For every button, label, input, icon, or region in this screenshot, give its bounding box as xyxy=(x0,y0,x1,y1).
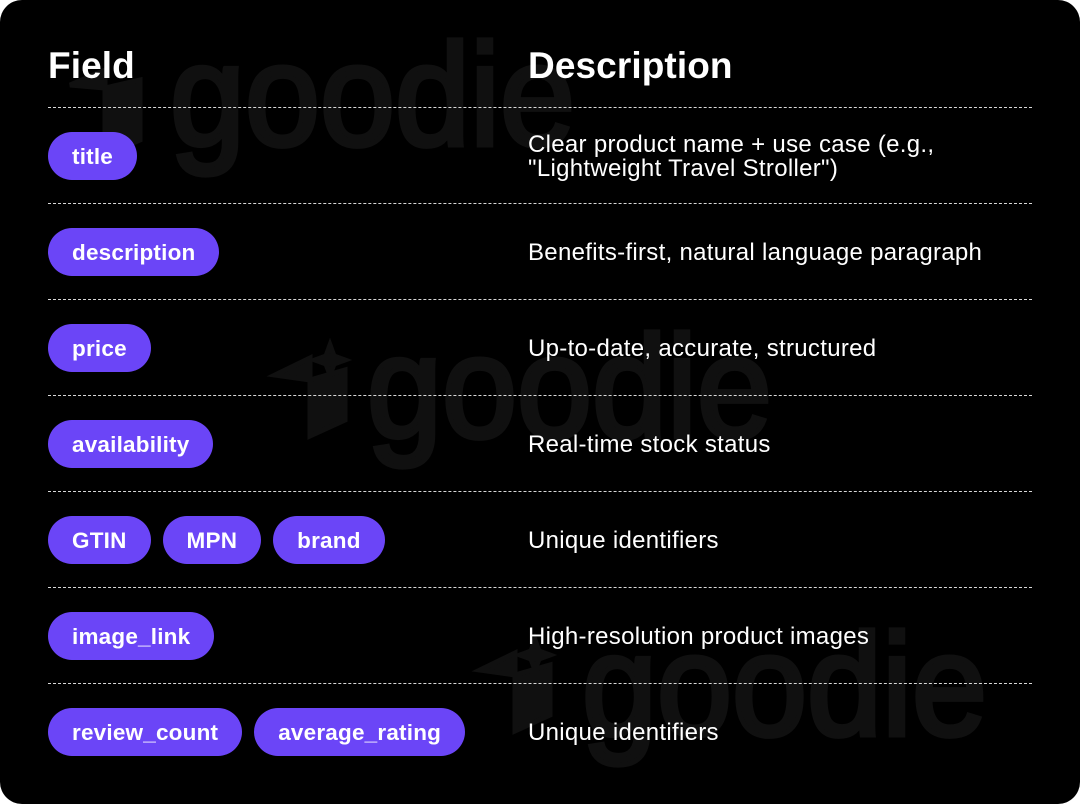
row: identifiers: GTIN xyxy=(72,528,127,553)
row: reviews: average_rating xyxy=(278,720,441,745)
desc: availability: Real-time stock status xyxy=(528,431,771,458)
header: Description: Description xyxy=(528,45,733,86)
row: image_link: image_link xyxy=(72,624,190,649)
row: identifiers: MPN xyxy=(187,528,237,553)
watermark logos: goodie xyxy=(170,14,575,176)
row: description: description xyxy=(72,240,195,265)
row: availability: availability xyxy=(72,432,189,457)
desc: reviews: Unique identifiers xyxy=(528,719,719,746)
desc: description: Benefits-first, natural language paragraph xyxy=(528,239,982,266)
desc: title xyxy=(528,131,934,182)
desc: title: Clear product name + use case (e.g., xyxy=(528,131,934,158)
desc: title: "Lightweight Travel Stroller") xyxy=(528,155,838,182)
row: reviews: review_count xyxy=(72,720,218,745)
watermark logos: goodie xyxy=(367,306,772,468)
row: reviews xyxy=(48,708,465,756)
row: identifiers xyxy=(48,516,385,564)
row: identifiers: brand xyxy=(297,528,361,553)
header: Field: Field xyxy=(48,45,135,86)
row: price: price xyxy=(72,336,127,361)
desc: image_link: High-resolution product images xyxy=(528,623,869,650)
desc: price: Up-to-date, accurate, structured xyxy=(528,335,876,362)
row: title: title xyxy=(72,144,113,169)
watermark logos: goodie xyxy=(582,604,987,766)
desc: identifiers: Unique identifiers xyxy=(528,527,719,554)
